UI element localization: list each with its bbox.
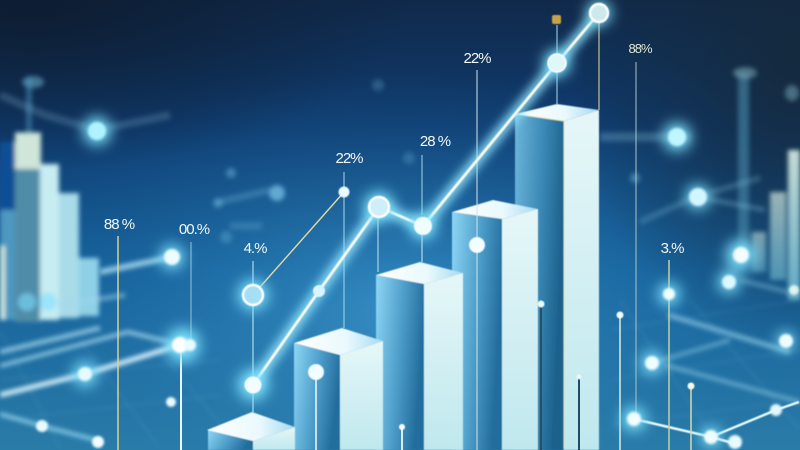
- floor grid: [0, 300, 800, 448]
- foreground markers: [243, 4, 694, 430]
- vertical leader lines: [118, 20, 691, 450]
- right blurred connector lines: [600, 137, 800, 402]
- bar 3: [376, 262, 463, 450]
- bar 2: [294, 328, 383, 450]
- right foreground connector: [634, 402, 799, 445]
- label 22% upper: 22%: [463, 50, 491, 67]
- label 88% left: 88 %: [104, 216, 135, 233]
- rising trend line: [253, 13, 599, 385]
- label 28%: 28 %: [420, 133, 451, 150]
- label 00%: 00.%: [179, 221, 210, 238]
- bar 4: [452, 200, 538, 450]
- small blurred background dots: [213, 79, 640, 243]
- label 3%: 3.%: [661, 240, 684, 257]
- right blurred bar cluster: [733, 67, 800, 300]
- label 22% mid: 22%: [335, 150, 363, 167]
- label 4%: 4.%: [244, 240, 267, 257]
- background glowing nodes: [36, 122, 799, 449]
- rising trend line glow: [253, 13, 599, 385]
- bar 1: [207, 412, 295, 450]
- left blurred bar cluster: [0, 76, 99, 322]
- bar 5: [515, 104, 599, 450]
- secondary trend line: [253, 192, 344, 295]
- label 88% right: 88%: [628, 41, 653, 56]
- left blurred connector lines: [0, 95, 180, 441]
- top marker small icon: [552, 15, 561, 24]
